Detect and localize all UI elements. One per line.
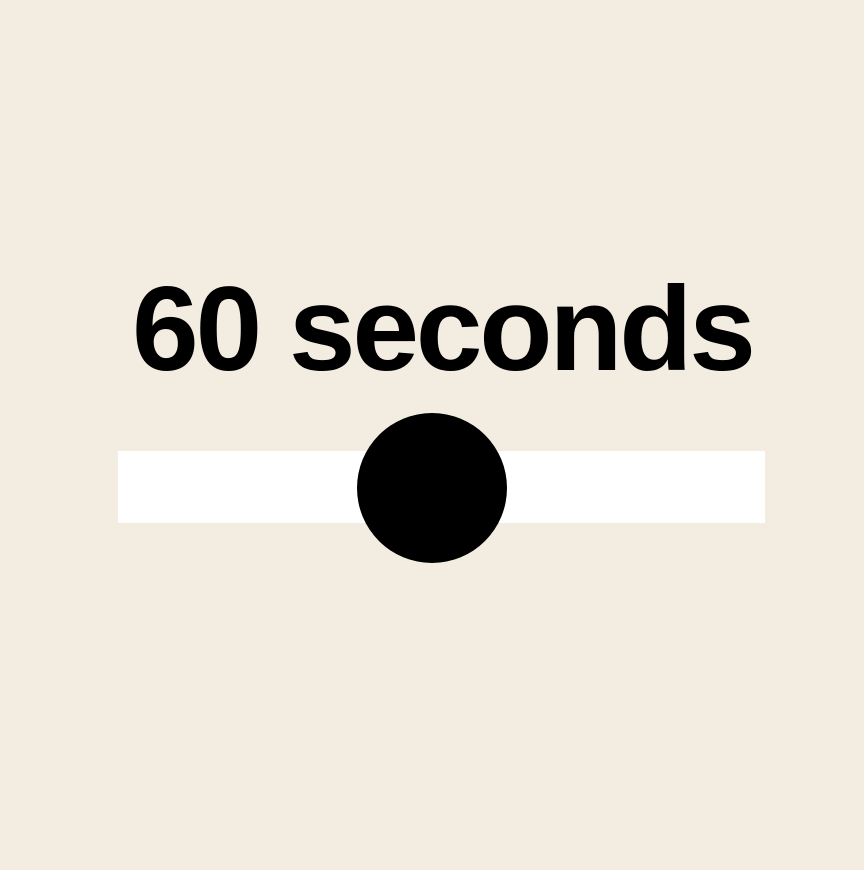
slider knob — [357, 413, 507, 563]
title: 60 seconds — [132, 262, 753, 396]
progress bar — [118, 451, 765, 523]
